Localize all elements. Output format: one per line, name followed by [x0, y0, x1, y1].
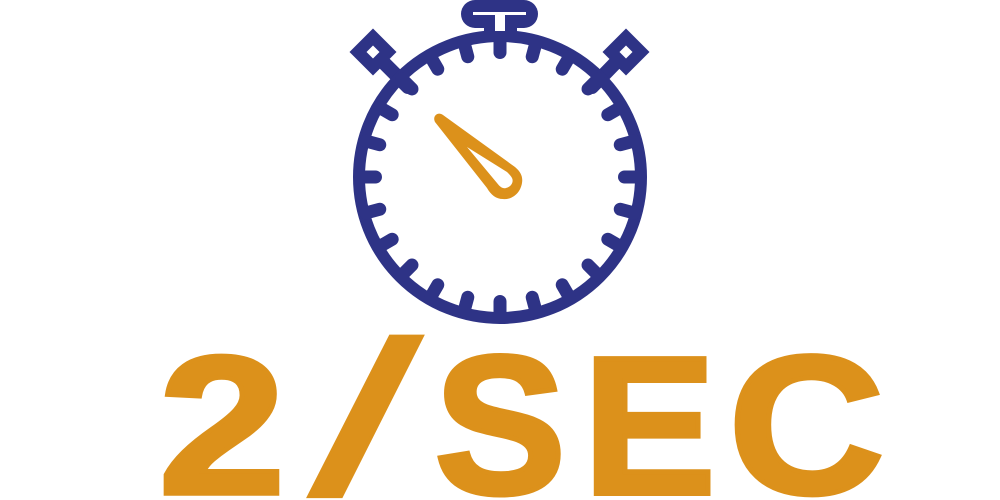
stopwatch needle [434, 114, 522, 199]
stopwatch crown [461, 0, 538, 34]
icon: stopwatch [350, 0, 650, 318]
left side button [350, 28, 408, 87]
headline: 2/SEC [158, 296, 884, 500]
right side button [592, 28, 650, 87]
stopwatch dial ring [359, 36, 641, 318]
dial tick marks [361, 38, 639, 316]
